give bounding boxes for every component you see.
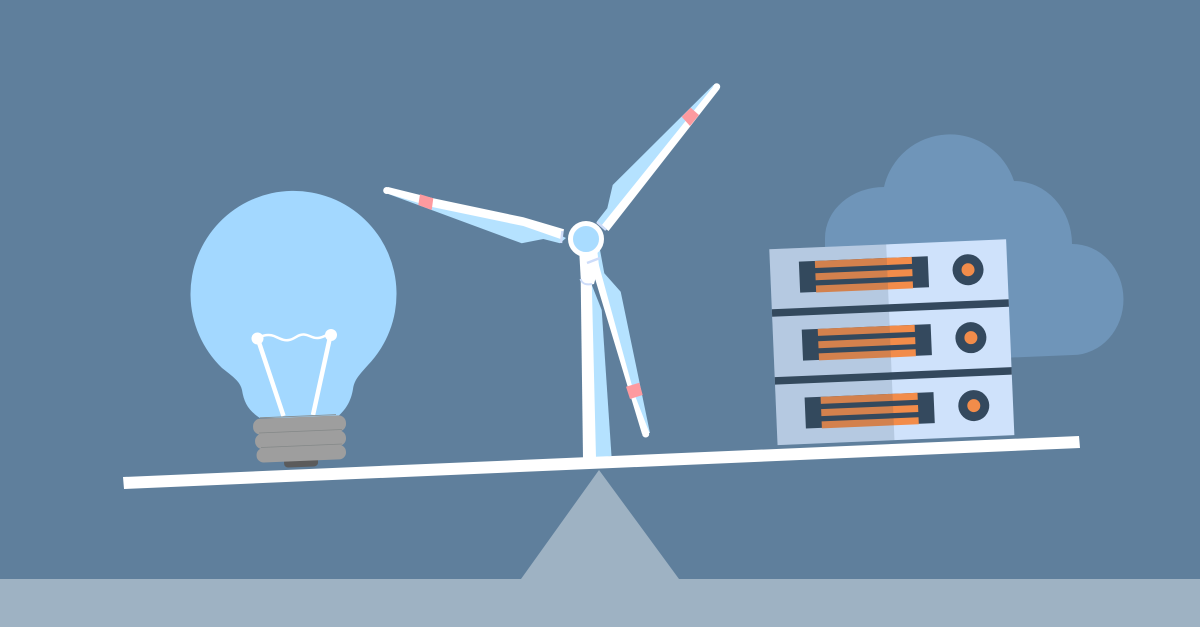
server unit 3 <box>805 389 990 429</box>
scale beam <box>123 436 1080 489</box>
nacelle collar <box>580 279 592 284</box>
turbine tower <box>581 280 612 458</box>
icon: wind turbine <box>383 83 720 458</box>
turbine blade upper right <box>597 83 720 231</box>
ground <box>0 579 1200 627</box>
server unit 1 <box>799 254 984 293</box>
turbine hub <box>570 224 602 254</box>
bulb base contact <box>284 454 318 468</box>
turbine blade lower <box>590 250 650 438</box>
icon: cloud <box>825 134 1123 358</box>
turbine nacelle <box>579 248 599 285</box>
server unit 2 <box>802 322 987 361</box>
icon: server rack <box>769 239 1014 445</box>
bulb screw base <box>253 415 346 463</box>
bulb filament <box>252 329 337 416</box>
bulb glass <box>191 191 397 418</box>
scale fulcrum <box>521 470 679 579</box>
server body <box>769 239 1014 445</box>
server shaded side <box>769 244 894 445</box>
blade root connectors <box>561 222 606 263</box>
server divider bars <box>772 299 1012 385</box>
icon: light bulb <box>191 191 397 468</box>
turbine blade left <box>383 187 566 243</box>
